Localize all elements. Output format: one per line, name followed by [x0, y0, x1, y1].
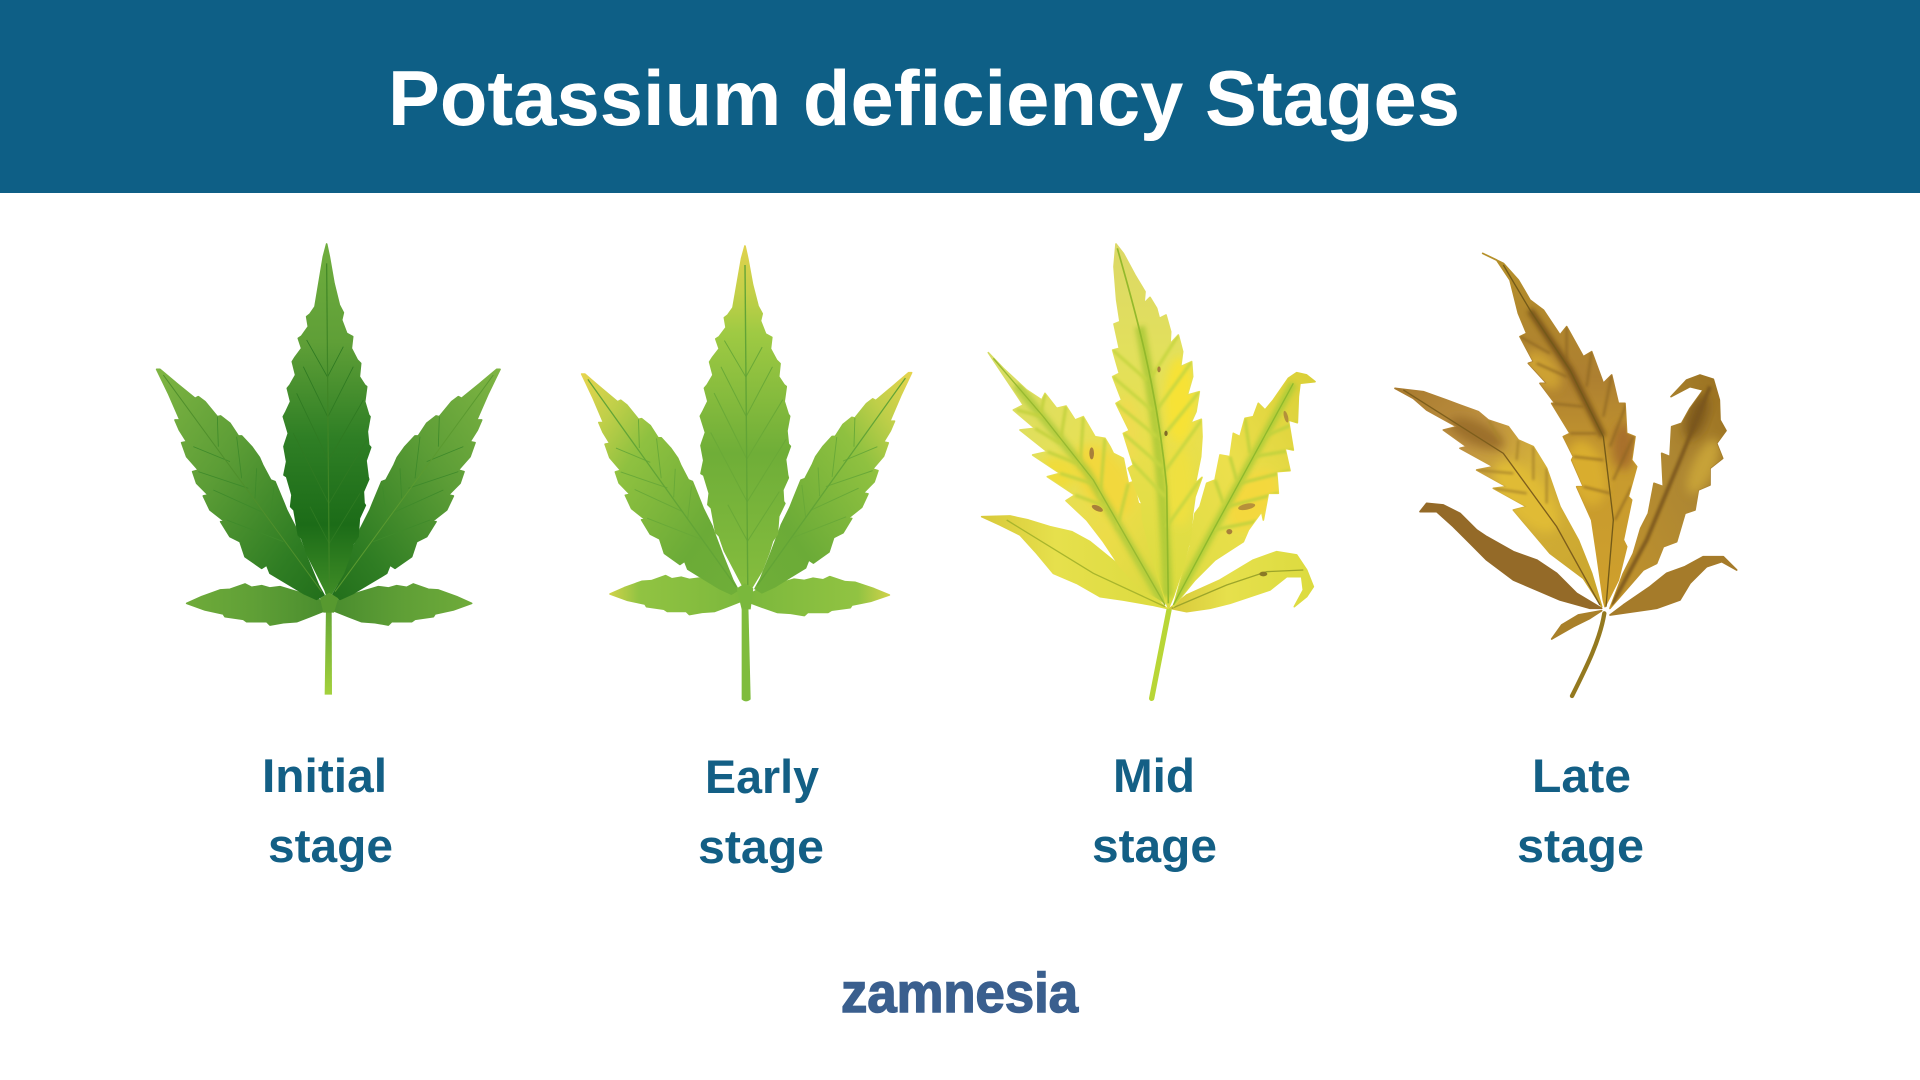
leaf: initial stage [157, 244, 500, 695]
brown spots [1089, 366, 1289, 576]
logo: zamnesia: zamnesia [841, 961, 1079, 1024]
label: mid stage: Mid [1113, 749, 1195, 802]
label: late stage [1517, 749, 1644, 872]
leaf: late stage [1395, 253, 1737, 696]
label: early stage: stage [698, 820, 824, 873]
label: mid stage: stage [1092, 819, 1217, 872]
header band [0, 0, 1920, 193]
label: initial stage: Initial [262, 749, 387, 802]
label: early stage: Early [705, 750, 819, 803]
label: mid stage [1092, 749, 1217, 872]
label: early stage [698, 750, 824, 873]
leaf: early stage [582, 246, 912, 701]
title: Potassium deficiency Stages [388, 54, 1460, 142]
label: late stage: Late [1532, 749, 1631, 802]
label: initial stage [262, 749, 393, 872]
label: initial stage: stage [268, 819, 393, 872]
leaf: mid stage [982, 244, 1315, 698]
label: late stage: stage [1517, 819, 1644, 872]
